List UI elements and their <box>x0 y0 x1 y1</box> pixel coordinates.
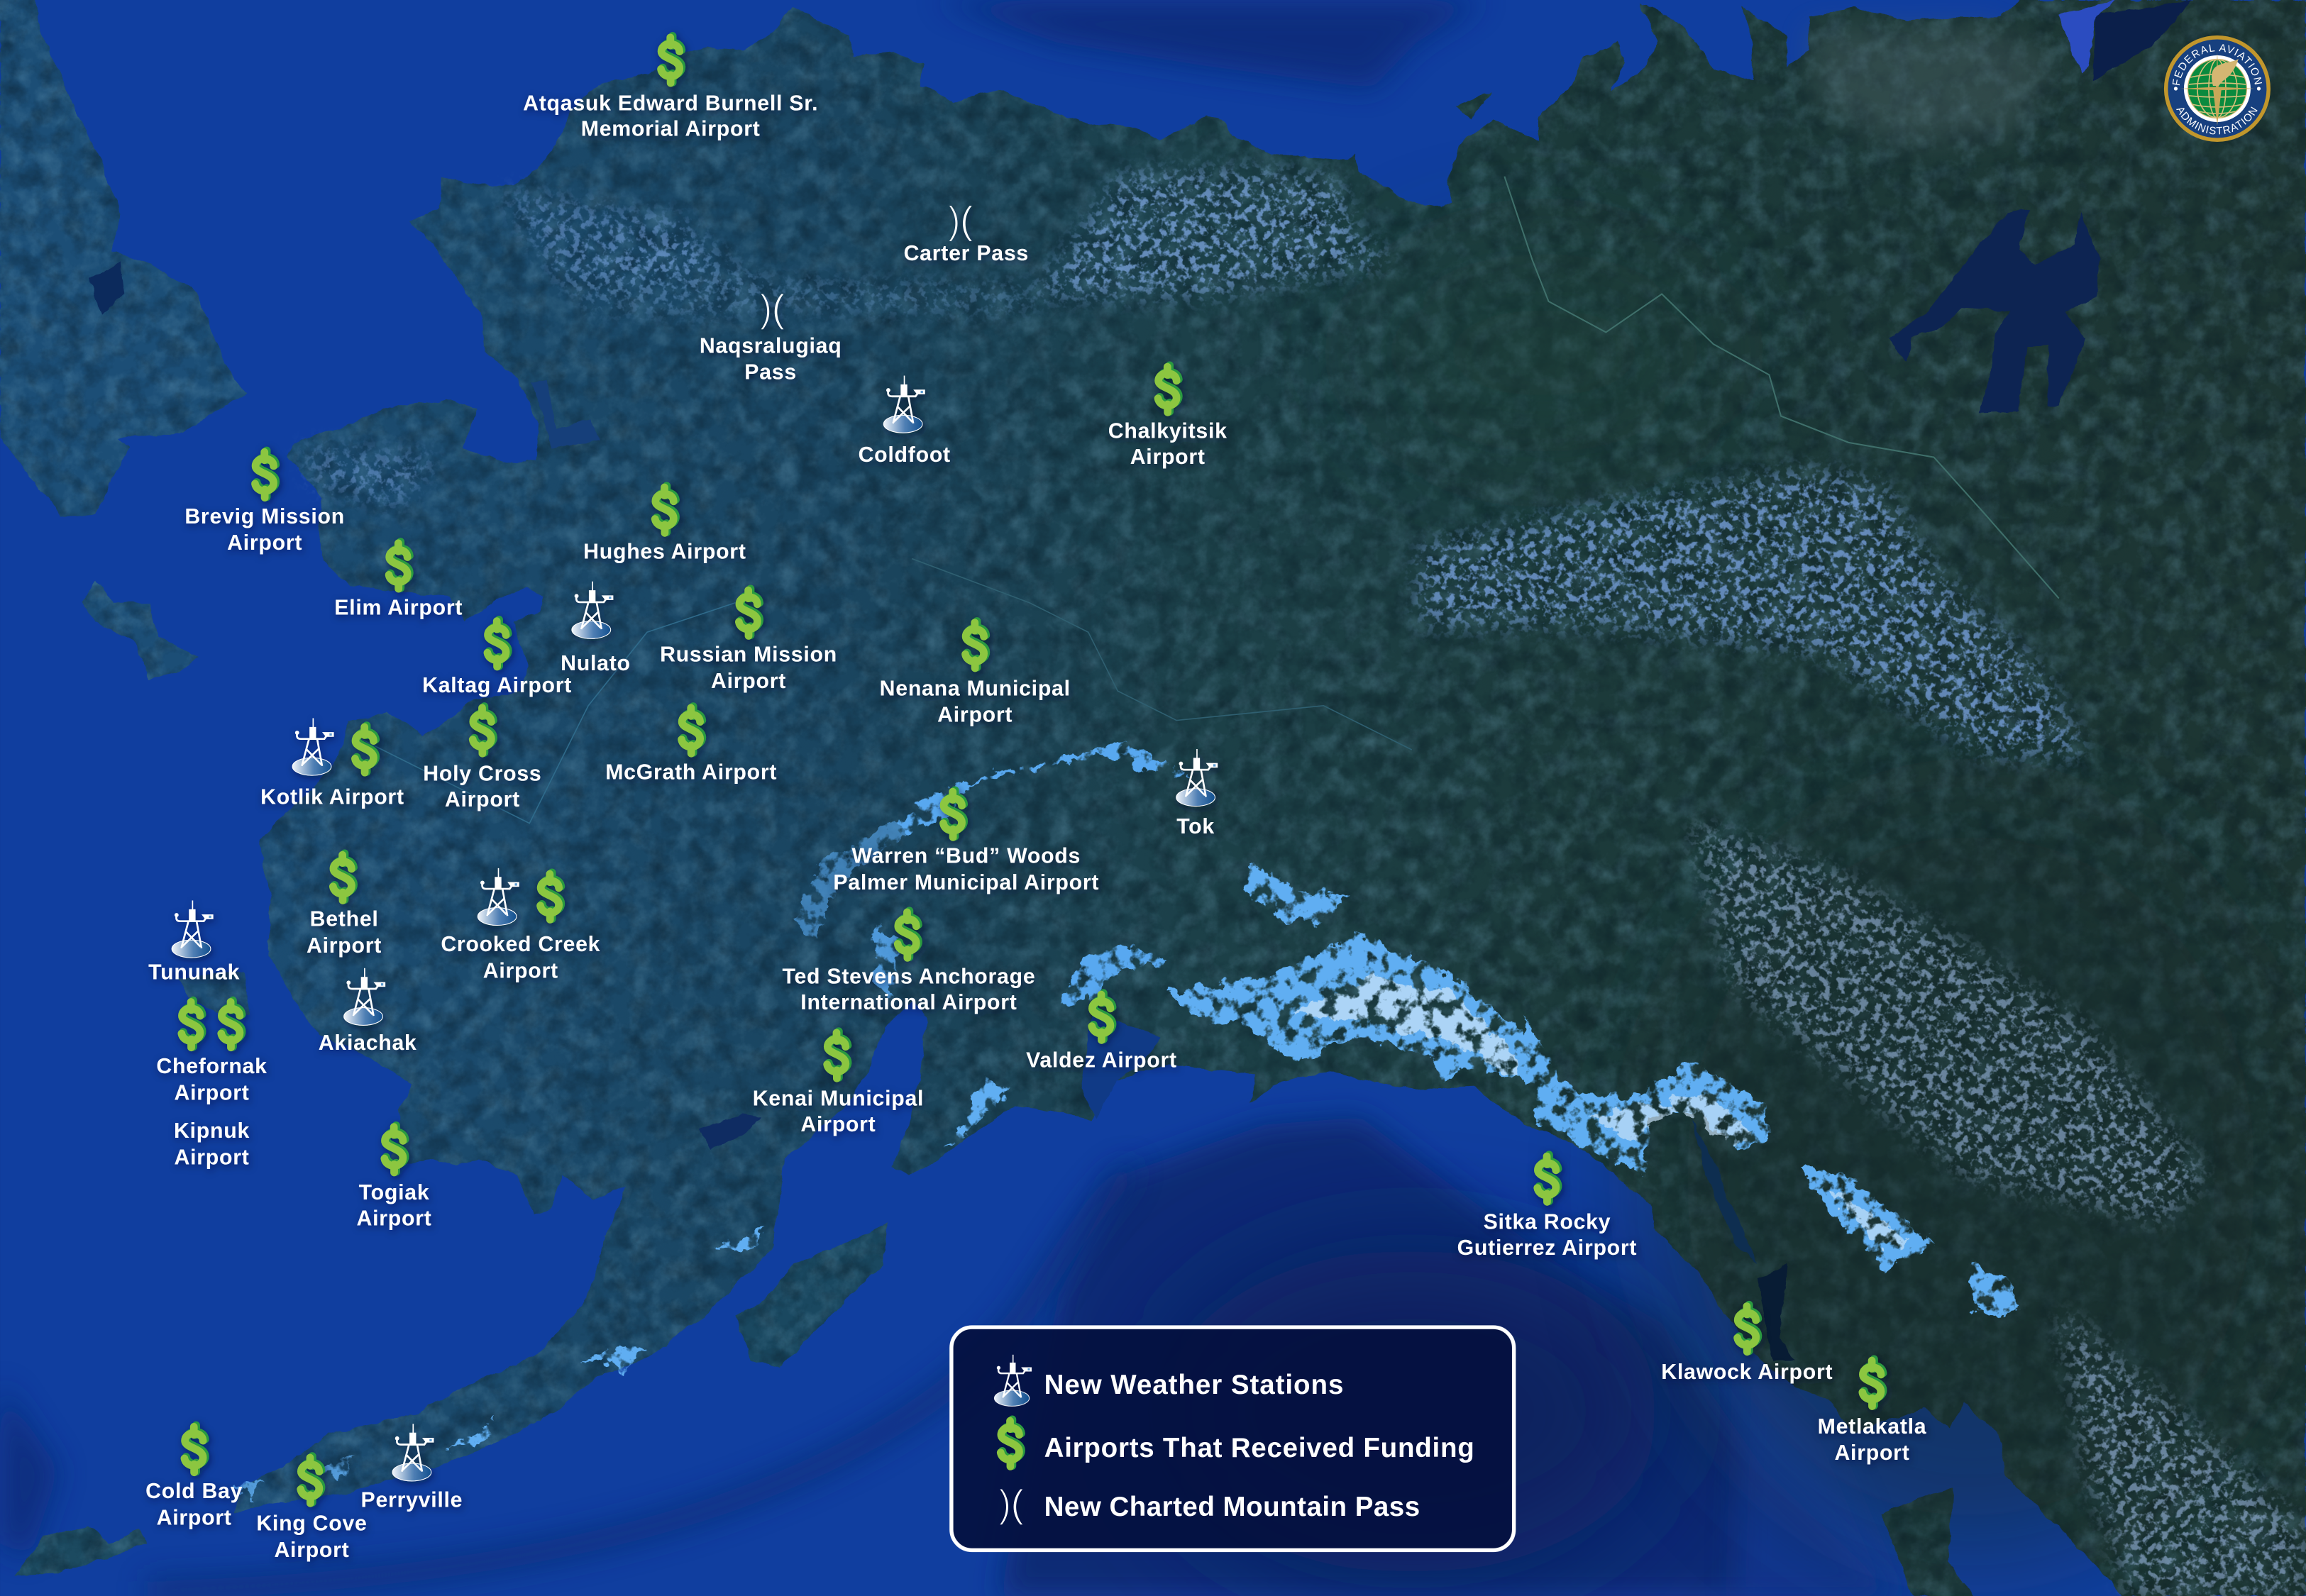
lakes and inland water <box>88 0 2191 1360</box>
location: Anchorage: International Airport <box>800 991 1017 1014</box>
location: Klawock <box>1661 1304 1833 1384</box>
legend: airports funding <box>1000 1419 1475 1466</box>
location: Valdez: Valdez Airport <box>1026 1049 1177 1073</box>
location: Naqsralugiaq Pass <box>700 294 842 384</box>
location: Hughes: Hughes Airport <box>583 541 746 564</box>
legend <box>951 1327 1514 1550</box>
location: Bethel: Bethel <box>310 908 379 931</box>
location: Russian Mission <box>660 589 837 693</box>
location: Togiak <box>357 1126 432 1231</box>
location: Tununak <box>148 900 240 984</box>
location: Nenana: Nenana Municipal <box>880 677 1071 700</box>
location: Cold Bay: Cold Bay <box>145 1480 243 1503</box>
location: Metlakatla <box>1818 1359 1927 1465</box>
location: Carter Pass: Carter Pass <box>904 242 1029 265</box>
location: Russian Mission: Airport <box>711 670 786 693</box>
location: Sitka <box>1457 1155 1637 1260</box>
location: Holy Cross <box>423 706 541 811</box>
location: Nulato <box>561 582 631 675</box>
land: Aleutian islands <box>15 1526 147 1576</box>
location: Metlakatla: Metlakatla <box>1818 1415 1927 1439</box>
location: Kipnuk: Airport <box>175 1146 250 1169</box>
legend: weather stations <box>994 1355 1344 1406</box>
land: Siberia <box>0 0 247 518</box>
location: Tok: Tok <box>1176 815 1215 838</box>
land: Haida Gwaii <box>1881 1487 1974 1596</box>
location: Chalkyitsik: Airport <box>1130 445 1206 469</box>
legend: weather stations: New Weather Stations <box>1044 1370 1344 1400</box>
location: Cold Bay: Airport <box>157 1506 232 1529</box>
location: Kotlik: Kotlik Airport <box>260 786 404 809</box>
map markers and labels <box>145 36 1927 1562</box>
location: Chefornak <box>156 1000 267 1104</box>
location: Sitka: Gutierrez Airport <box>1457 1236 1637 1260</box>
legend: mountain pass: New Charted Mountain Pass <box>1044 1492 1420 1522</box>
location: Tununak: Tununak <box>148 960 240 984</box>
location: Palmer <box>833 790 1099 894</box>
location: Crooked Creek <box>441 868 600 982</box>
location: Togiak: Airport <box>357 1207 432 1231</box>
location: Valdez <box>1026 993 1177 1073</box>
location: Atqasuk <box>523 36 818 141</box>
location: Anchorage <box>782 911 1035 1014</box>
location: Hughes <box>583 486 746 564</box>
location: Nenana <box>880 621 1071 727</box>
location: Brevig Mission: Brevig Mission <box>184 505 345 528</box>
FAA seal: ADMINISTRATION <box>2176 106 2258 135</box>
location: Chefornak: Airport <box>175 1081 250 1104</box>
location: King Cove: King Cove <box>256 1512 368 1536</box>
location: Tok <box>1176 749 1218 838</box>
location: Holy Cross: Holy Cross <box>423 763 541 786</box>
snow: Alaska Range and coastal mountains <box>236 743 2021 1500</box>
location: Atqasuk: Memorial Airport <box>581 118 761 141</box>
land: Nunivak Island <box>180 970 250 1014</box>
location: Carter Pass <box>904 206 1029 265</box>
location: McGrath: McGrath Airport <box>605 760 777 784</box>
location: Togiak: Togiak <box>359 1181 429 1204</box>
FAA seal <box>2164 35 2271 142</box>
location: Kipnuk <box>174 1000 250 1169</box>
location: Crooked Creek: Crooked Creek <box>441 933 600 956</box>
location: Chalkyitsik: Chalkyitsik <box>1108 420 1228 443</box>
location: Nenana: Airport <box>937 704 1013 727</box>
location: Elim: Elim Airport <box>334 596 463 619</box>
location: Akiachak <box>319 968 417 1055</box>
location: Klawock: Klawock Airport <box>1661 1361 1833 1384</box>
location: King Cove <box>256 1456 368 1562</box>
location: Akiachak: Akiachak <box>319 1031 417 1055</box>
location: Coldfoot: Coldfoot <box>859 443 951 467</box>
location: Kenai: Kenai Municipal <box>753 1087 924 1111</box>
location: Kotlik <box>260 718 404 809</box>
location: King Cove: Airport <box>274 1539 350 1562</box>
location: Holy Cross: Airport <box>445 788 520 811</box>
location: Atqasuk: Atqasuk Edward Burnell Sr. <box>523 92 818 115</box>
location: Brevig Mission <box>184 450 345 555</box>
location: Metlakatla: Airport <box>1834 1441 1910 1465</box>
location: Coldfoot <box>859 376 951 467</box>
location: Kaltag <box>422 620 572 697</box>
location: Kaltag: Kaltag Airport <box>422 674 572 697</box>
location: Chefornak: Chefornak <box>156 1055 267 1078</box>
FAA seal: FEDERAL AVIATION <box>2173 44 2262 85</box>
location: Palmer: Palmer Municipal Airport <box>833 871 1099 894</box>
location: Sitka: Sitka Rocky <box>1484 1211 1611 1234</box>
location: Naqsralugiaq Pass: Naqsralugiaq <box>700 334 842 358</box>
land: St Lawrence Island <box>82 580 199 680</box>
location: Bethel: Airport <box>307 934 382 958</box>
location: Russian Mission: Russian Mission <box>660 643 837 667</box>
location: Naqsralugiaq Pass: Pass <box>744 361 797 384</box>
location: Kipnuk: Kipnuk <box>174 1119 250 1143</box>
location: Palmer: Warren “Bud” Woods <box>851 845 1081 868</box>
location: Chalkyitsik <box>1108 365 1228 469</box>
legend: airports funding: Airports That Received Funding <box>1044 1433 1475 1463</box>
location: Perryville <box>361 1424 463 1512</box>
land: arctic islands <box>1456 92 1493 121</box>
location: Brevig Mission: Airport <box>227 531 302 555</box>
location: Perryville: Perryville <box>361 1488 463 1512</box>
location: Elim <box>334 542 463 619</box>
location: McGrath <box>605 706 777 784</box>
location: Bethel <box>307 853 382 958</box>
land: Kodiak Island <box>735 1223 890 1368</box>
location: Kenai: Airport <box>800 1113 876 1136</box>
location: Nulato: Nulato <box>561 652 631 675</box>
location: Crooked Creek: Airport <box>483 959 558 982</box>
location: Cold Bay <box>145 1425 243 1529</box>
location: Kenai <box>753 1031 924 1136</box>
location: Anchorage: Ted Stevens Anchorage <box>782 965 1035 989</box>
